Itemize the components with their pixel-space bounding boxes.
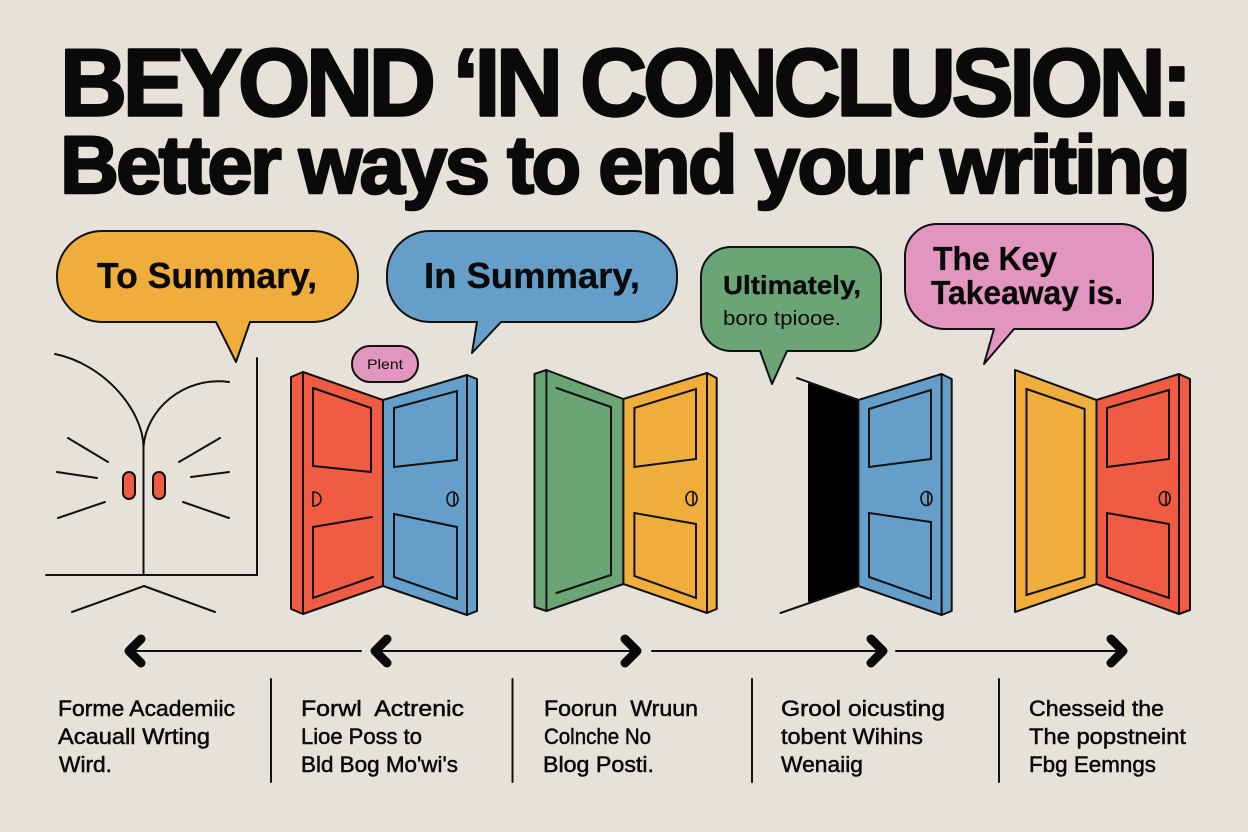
text block: column 2 xyxy=(301,696,464,777)
door pair: yellow and red xyxy=(1015,370,1190,614)
text block: column 5 xyxy=(1029,696,1186,777)
column dividers xyxy=(271,679,999,782)
text block: column 2: Forwl Actrenic xyxy=(301,696,464,721)
text block: column 3: Foorun Wruun xyxy=(544,696,698,721)
text block: column 3: Blog Posti. xyxy=(543,752,654,777)
arrow: timeline third segment xyxy=(652,639,883,663)
text block: column 3 xyxy=(543,696,698,777)
arrow: timeline left segment xyxy=(128,639,361,663)
speech bubble: Ultimately: boro tpiooe. xyxy=(723,308,841,330)
icon: left door handle xyxy=(123,472,135,499)
text block: column 2: Bld Bog Mo'wi's xyxy=(301,752,458,777)
small pink label: Plent xyxy=(352,346,418,382)
text block: column 4: tobent Wihins xyxy=(781,724,923,749)
speech bubble: To Summary: To Summary, xyxy=(97,255,317,296)
speech bubble: The Key Takeaway xyxy=(905,224,1153,364)
door pair: black opening and blue door xyxy=(780,374,952,615)
text block: column 1: Forme Academiic xyxy=(58,696,235,721)
text block: column 2: Lioe Poss to xyxy=(301,724,422,749)
text block: column 3: Colnche No xyxy=(544,724,651,749)
speech bubble: In Summary: In Summary, xyxy=(424,255,640,296)
speech bubble: The Key Takeaway: The Key xyxy=(933,240,1058,277)
title: Better ways to end your writing xyxy=(60,120,1188,211)
text block: column 4: Grool oicusting xyxy=(781,696,945,721)
speech bubble: To Summary xyxy=(57,231,358,362)
line drawing: closed door outline xyxy=(46,354,257,612)
speech bubble: Ultimately: Ultimately, xyxy=(723,270,861,300)
text block: column 1: Wird. xyxy=(59,752,112,777)
text block: column 4 xyxy=(781,696,945,777)
text block: column 1 xyxy=(58,696,235,777)
text block: column 4: Wenaiig xyxy=(781,752,863,777)
door pair: green and yellow xyxy=(534,370,717,613)
arrow: timeline second segment xyxy=(375,639,637,663)
title xyxy=(60,30,1188,211)
speech bubble: The Key Takeaway: Takeaway is. xyxy=(931,274,1123,311)
title: BEYOND ‘IN CONCLUSION: xyxy=(60,30,1188,136)
speech bubble: Ultimately xyxy=(701,247,881,384)
text block: column 1: Acauall Wrting xyxy=(58,724,210,749)
small pink label: Plent: Plent xyxy=(367,356,403,372)
icon: right door handle xyxy=(153,472,165,499)
speech bubble: In Summary xyxy=(387,231,677,353)
text block: column 5: Chesseid the xyxy=(1029,696,1164,721)
door pair: red and blue xyxy=(291,372,477,615)
arrow: timeline fourth segment xyxy=(896,639,1123,663)
text block: column 5: The popstneint xyxy=(1029,724,1186,749)
text block: column 5: Fbg Eemngs xyxy=(1029,752,1156,777)
